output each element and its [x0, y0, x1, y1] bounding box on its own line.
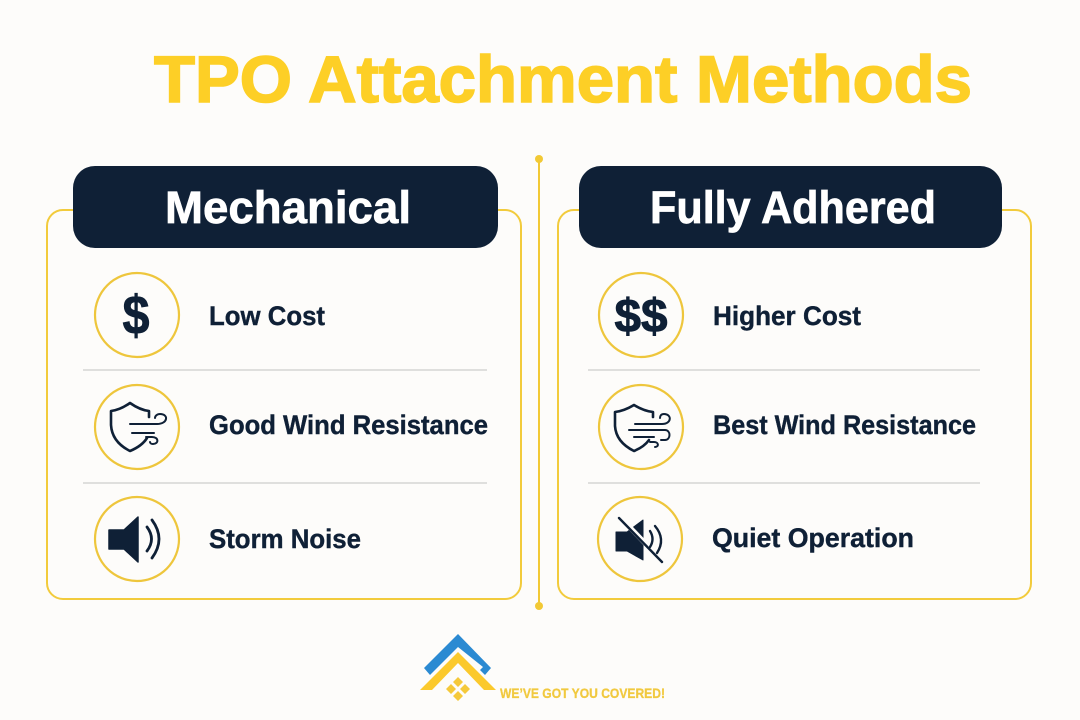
- panel header: Mechanical: [73, 166, 498, 248]
- icon: double dollar: [599, 273, 683, 357]
- row: Best Wind Resistance: Best Wind Resistance: [713, 410, 976, 440]
- icon: muted speaker: [598, 497, 682, 581]
- panel header: Mechanical: Mechanical: [165, 182, 411, 233]
- panel: Fully Adhered: [558, 166, 1031, 599]
- icon: speaker with sound: [95, 497, 179, 581]
- row: Good Wind Resistance: Good Wind Resistance: [209, 410, 488, 440]
- icon: shield with wind: [95, 385, 179, 469]
- icon: single dollar: $: [122, 284, 150, 346]
- row: Low Cost: [95, 273, 325, 357]
- icon: double dollar: $$: [614, 289, 668, 342]
- icon: single dollar: [95, 273, 179, 357]
- logo icon: blue and yellow roof: [420, 634, 496, 701]
- row: Storm Noise: [95, 497, 361, 581]
- row: Quiet Operation: Quiet Operation: [712, 523, 914, 553]
- row: Higher Cost: [599, 273, 861, 357]
- title: TPO Attachment Methods: [154, 42, 972, 116]
- row: Best Wind Resistance: [599, 385, 976, 469]
- panel header: Fully Adhered: Fully Adhered: [650, 182, 936, 233]
- row: Good Wind Resistance: [95, 385, 488, 469]
- row: Storm Noise: Storm Noise: [209, 524, 361, 554]
- panel: Mechanical: [47, 166, 521, 599]
- row: Low Cost: Low Cost: [209, 301, 325, 331]
- row: Quiet Operation: [598, 497, 914, 581]
- center divider: [535, 155, 543, 610]
- logo: [420, 634, 665, 701]
- icon: shield with strong wind: [599, 385, 683, 469]
- panel header: Fully Adhered: [579, 166, 1002, 248]
- row: Higher Cost: Higher Cost: [713, 301, 861, 331]
- logo tagline: WE’VE GOT YOU COVERED!: [500, 685, 665, 701]
